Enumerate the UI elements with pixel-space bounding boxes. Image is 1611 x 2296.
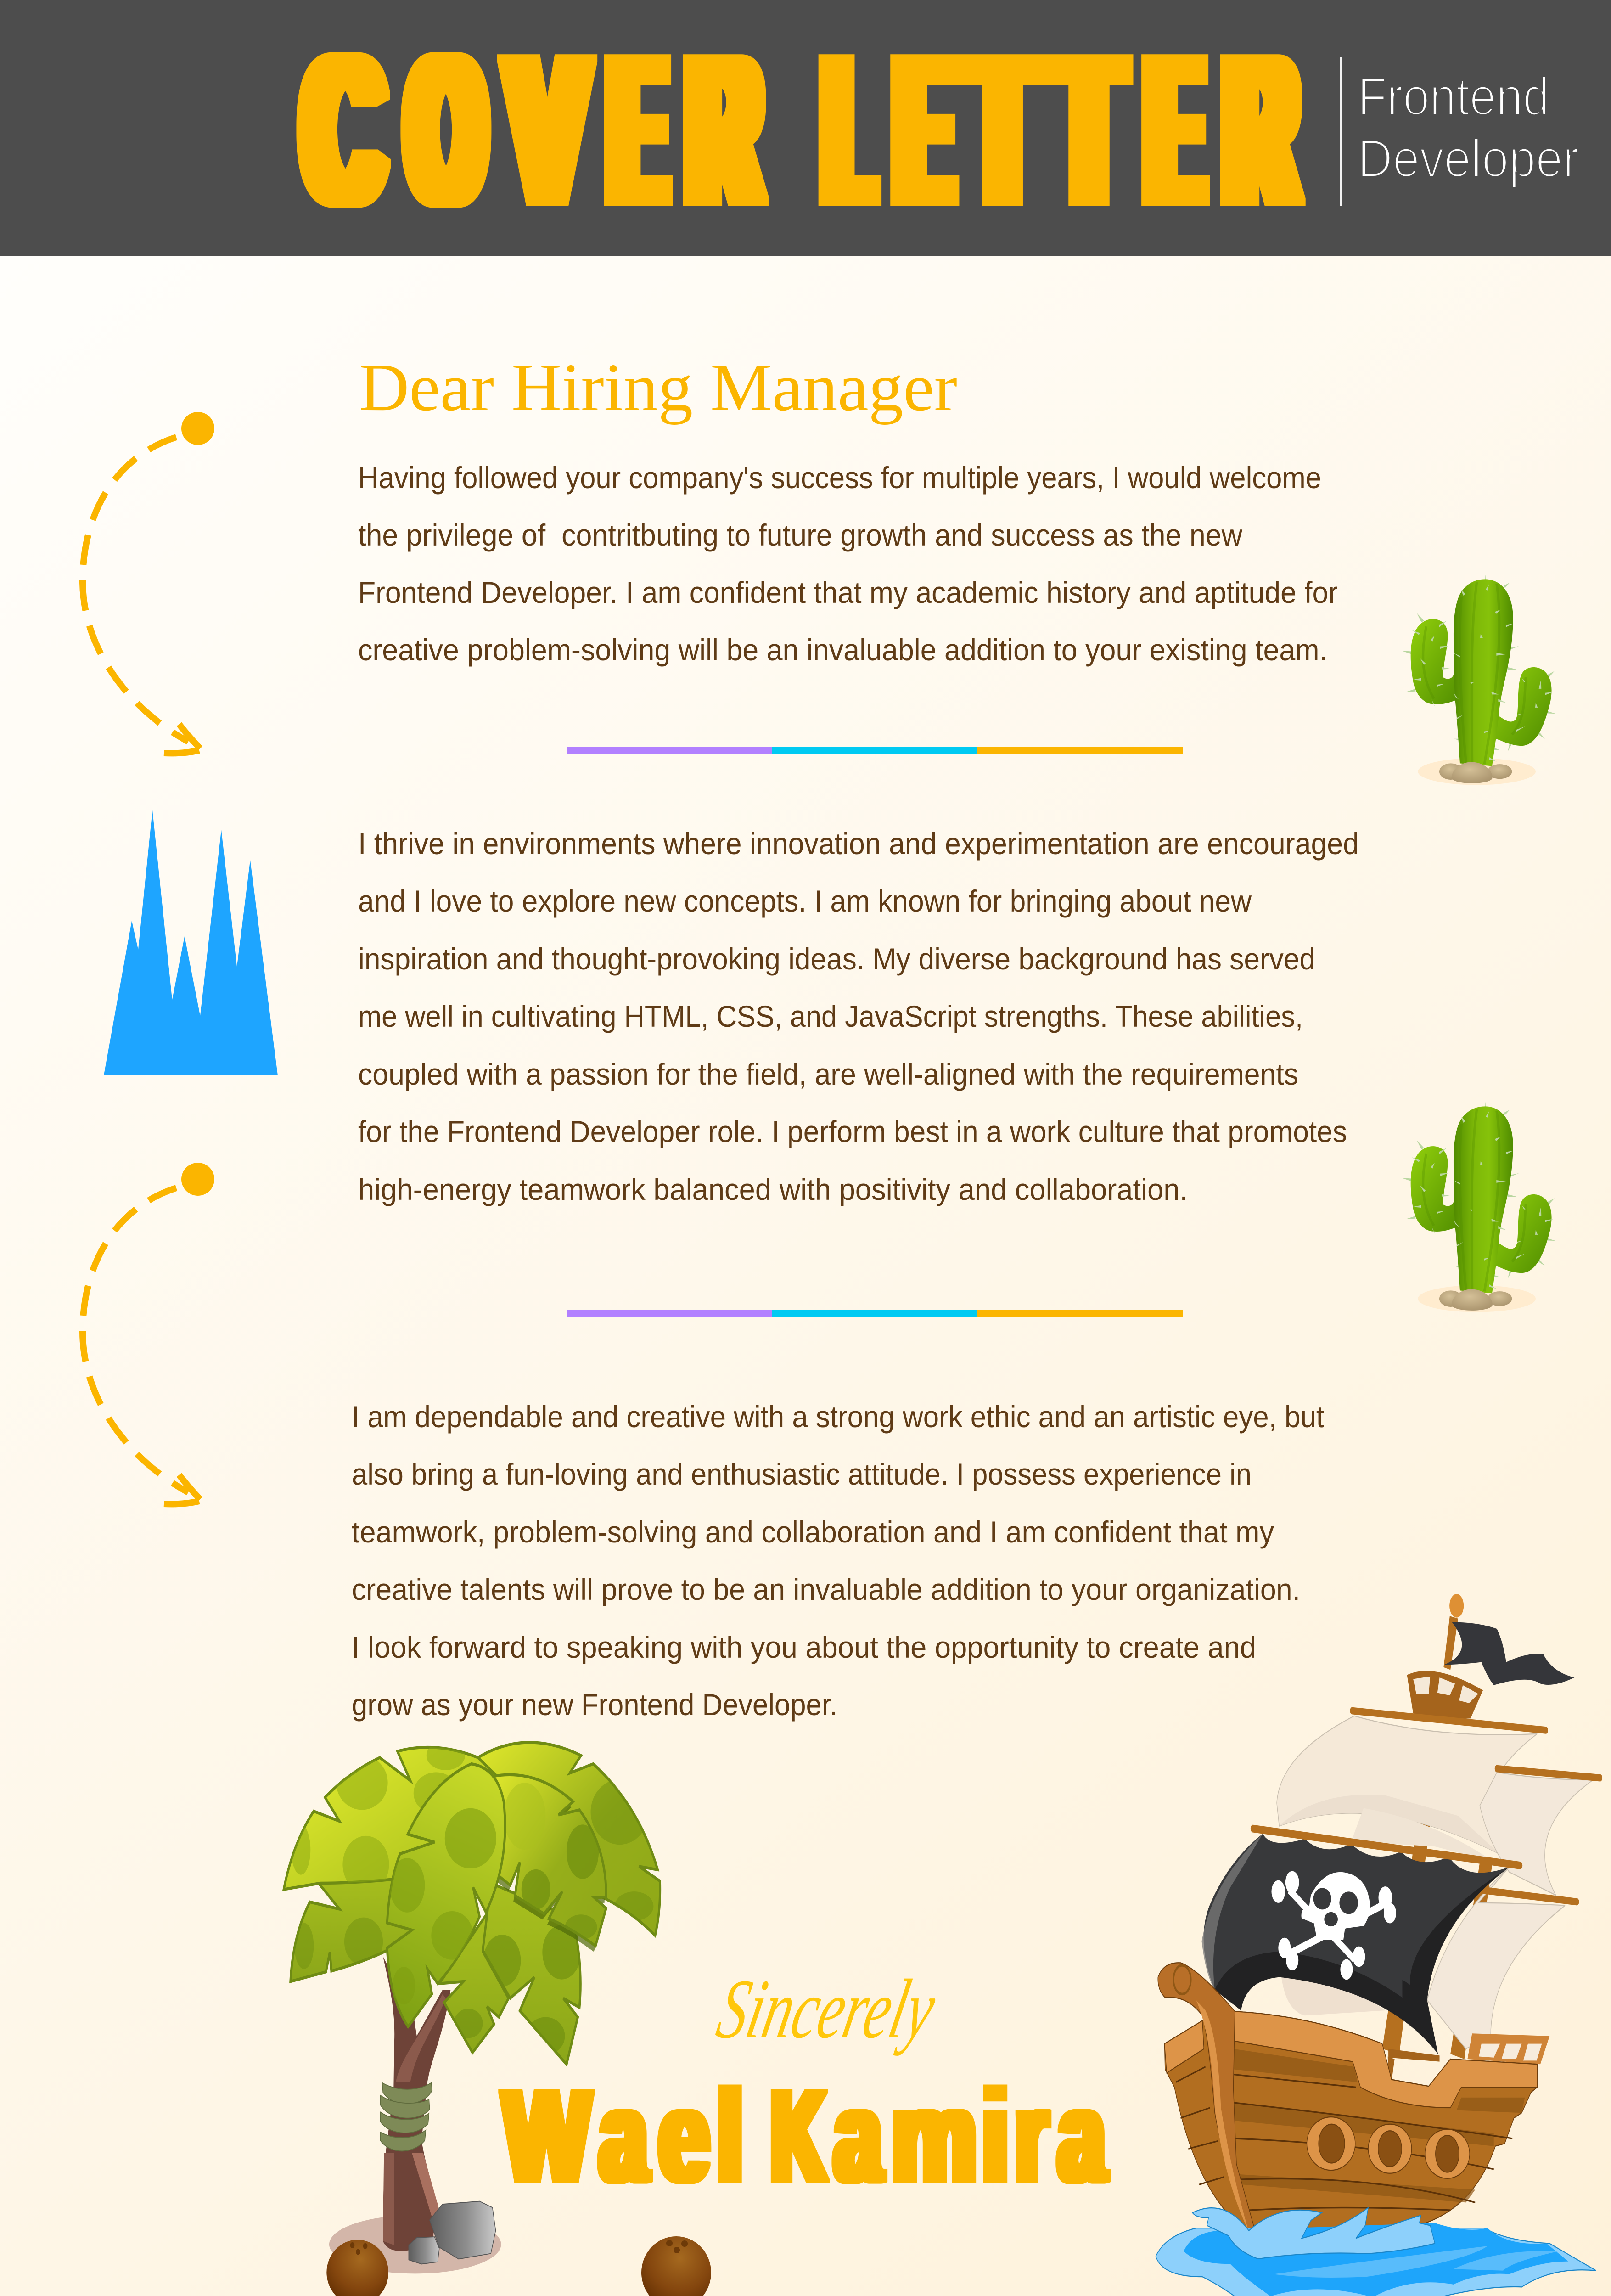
title: cover letter: E bbox=[612, 12, 663, 247]
title: cover letter: T bbox=[969, 12, 1035, 247]
signature name: i bbox=[982, 2063, 1009, 2209]
subtitle: frontend developer: Developer bbox=[1358, 129, 1579, 188]
title: cover letter: E bbox=[898, 12, 949, 247]
crow's nest bbox=[1407, 1671, 1483, 1719]
paragraph 2 bbox=[358, 827, 1359, 1206]
leaves bbox=[284, 1741, 660, 2065]
coconut left bbox=[326, 2240, 388, 2296]
skull and crossbones bbox=[1271, 1871, 1396, 1980]
cream sails bbox=[1277, 1716, 1593, 2049]
paragraph 1 bbox=[358, 461, 1338, 667]
black sail bbox=[1201, 1834, 1509, 2054]
sign-off: sincerely: Sincerely bbox=[710, 1962, 944, 2056]
header divider bbox=[1340, 57, 1342, 206]
paragraph 3: creative talents will prove to be an invaluable addition to your organization. bbox=[352, 1572, 1300, 1606]
ground shadow bbox=[329, 2215, 501, 2273]
subtitle: frontend developer: Frontend bbox=[1358, 67, 1549, 126]
paragraph 1: creative problem-solving will be an invaluable addition to your existing team. bbox=[358, 633, 1327, 667]
paragraph 3: I look forward to speaking with you about the opportunity to create and bbox=[352, 1630, 1256, 1664]
paragraph 3: grow as your new Frontend Developer. bbox=[352, 1688, 837, 1722]
paragraph 2: for the Frontend Developer role. I perform best in a work culture that promotes bbox=[358, 1114, 1347, 1148]
signature name: K bbox=[771, 2063, 825, 2209]
title: cover letter: V bbox=[509, 12, 586, 247]
signature name: a bbox=[600, 2063, 647, 2209]
header band bbox=[0, 0, 1611, 256]
title: cover letter: C bbox=[305, 12, 381, 247]
divider 1 bbox=[567, 747, 1183, 754]
header band: R bbox=[1227, 12, 1295, 247]
yards bbox=[1352, 1711, 1600, 1902]
title: cover letter: E bbox=[1149, 12, 1200, 247]
divider 2 bbox=[567, 1310, 1183, 1317]
arrow 1: dashed curve bbox=[83, 412, 214, 753]
signature name: a bbox=[835, 2063, 882, 2209]
paragraph 1: Frontend Developer. I am confident that my academic history and aptitude for bbox=[358, 575, 1338, 609]
signature name: W bbox=[504, 2063, 590, 2209]
paragraph 3: I am dependable and creative with a strong work ethic and an artistic eye, but bbox=[352, 1400, 1324, 1434]
signature name: m bbox=[892, 2063, 977, 2209]
paragraph 2: and I love to explore new concepts. I am known for bringing about new bbox=[358, 884, 1252, 918]
signature name: e bbox=[659, 2063, 709, 2209]
paragraph 2: inspiration and thought-provoking ideas. My diverse background has served bbox=[358, 942, 1315, 976]
subtitle: frontend developer bbox=[1358, 67, 1579, 188]
masts and flag bbox=[1382, 1594, 1574, 2059]
signature name: l bbox=[717, 2063, 743, 2209]
heading: dear hiring manager: Dear Hiring Manager bbox=[359, 350, 957, 425]
title: cover letter: R bbox=[689, 12, 758, 247]
title: cover letter: O bbox=[410, 12, 483, 247]
signature name: a bbox=[1059, 2063, 1105, 2209]
arrow 2: dashed curve bbox=[83, 1163, 214, 1504]
paragraph 3: also bring a fun-loving and enthusiastic attitude. I possess experience in bbox=[352, 1457, 1252, 1491]
icon: pirate ship bbox=[1156, 1594, 1600, 2296]
paragraph 1: the privilege of contritbuting to future growth and success as the new bbox=[358, 518, 1242, 552]
rocks bbox=[409, 2201, 496, 2264]
portholes bbox=[1307, 2117, 1470, 2178]
hull bbox=[1158, 1963, 1549, 2238]
paragraph 2: coupled with a passion for the field, are well-aligned with the requirements bbox=[358, 1057, 1298, 1091]
paragraph 2: me well in cultivating HTML, CSS, and JavaScript strengths. These abilities, bbox=[358, 999, 1303, 1033]
paragraph 3: teamwork, problem-solving and collaboration and I am confident that my bbox=[352, 1515, 1274, 1549]
icon: palm tree bbox=[284, 1741, 660, 2296]
icon: coconut bbox=[641, 2236, 711, 2296]
water bbox=[1156, 2208, 1596, 2296]
title: cover letter: T bbox=[1056, 12, 1122, 247]
signature name: r bbox=[1016, 2063, 1047, 2209]
paragraph 2: I thrive in environments where innovation and experimentation are encouraged bbox=[358, 827, 1359, 861]
paragraph 3 bbox=[352, 1400, 1324, 1722]
icon: blue spiky mountains bbox=[104, 810, 278, 1075]
icon: cactus 1 bbox=[1402, 575, 1555, 785]
rope bbox=[380, 2083, 432, 2151]
trunk bbox=[383, 1956, 450, 2251]
paragraph 1: Having followed your company's success for multiple years, I would welcome bbox=[358, 461, 1321, 495]
title: cover letter: L bbox=[826, 12, 871, 247]
paragraph 2: high-energy teamwork balanced with positivity and collaboration. bbox=[358, 1172, 1188, 1206]
icon: cactus 2 bbox=[1402, 1102, 1555, 1312]
